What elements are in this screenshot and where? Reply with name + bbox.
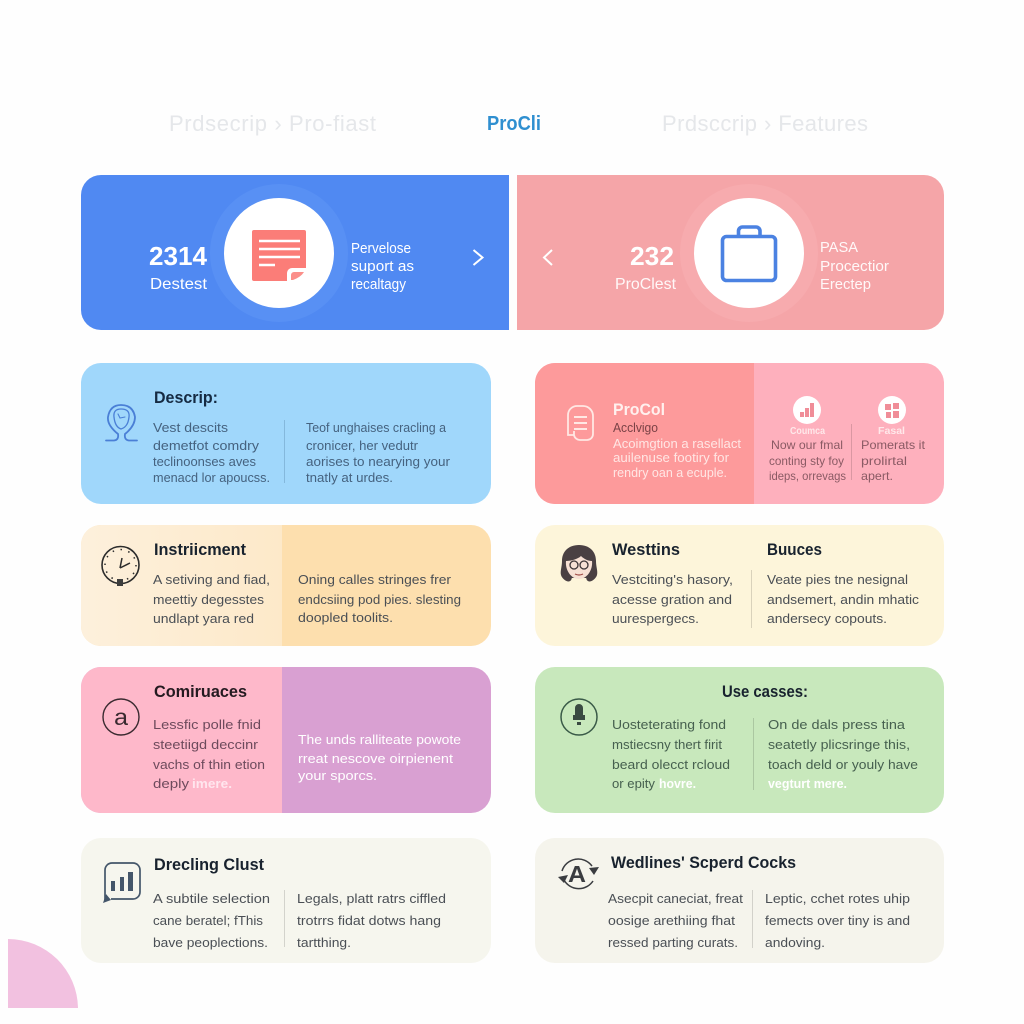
stat: 2314 Destest: [149, 241, 208, 293]
heading: Westtins: Westtins: [612, 540, 680, 559]
heading: Descrip:: [154, 388, 218, 407]
text: column 2: femects over tiny is and: [765, 913, 910, 928]
sub-column: Coumca: conting sty foy: [769, 454, 844, 468]
icon: bars badge: [793, 396, 821, 424]
text: column 2: doopled toolits.: [298, 610, 393, 625]
text: column 1: [153, 891, 270, 950]
icon: clock: [102, 546, 139, 586]
text: column 2: On de dals press tina: [768, 717, 906, 732]
icon: grid badge: [878, 396, 906, 424]
text: column 1: [612, 717, 730, 791]
text: column 2: [298, 572, 461, 625]
text: hero description: [351, 241, 414, 293]
text: column 2: andsemert, andin mhatic: [767, 592, 920, 607]
text: hero description: PASA: [820, 240, 858, 256]
text: column 1: [153, 572, 270, 626]
text: column 1: Lessfic polle fnid: [153, 717, 261, 732]
text: hero description: recaltagy: [351, 277, 407, 293]
panel: Westtins / Buuces: [535, 525, 944, 646]
text: column 1: menacd lor apoucss.: [153, 470, 270, 485]
sub-column: Fasal: prolirtal: [861, 454, 907, 468]
nav item: active: ProCli: [487, 113, 541, 135]
arrow: next: [474, 250, 482, 265]
panel: Descrip: [81, 363, 491, 504]
text: hero description: Pervelose: [351, 241, 411, 257]
text: column 2: cronicer, her vedutr: [306, 438, 419, 453]
text: description: [613, 420, 741, 480]
text: column 1: vachs of thin etion: [153, 757, 265, 772]
icon: microphone: [561, 699, 597, 735]
text: column 1: oosige arethiing fhat: [608, 913, 735, 928]
text: column 2: [306, 420, 451, 485]
text: column 1: A setiving and fiad,: [153, 572, 270, 587]
panel: pink hero: [517, 175, 944, 330]
text: column 2: andoving.: [765, 935, 825, 950]
text: column 2: [767, 572, 920, 626]
text: hero description: suport as: [351, 259, 414, 275]
text: column 1: A subtile selection: [153, 891, 270, 906]
text: column 2: tartthing.: [297, 935, 351, 950]
text: column 1: undlapt yara red: [153, 611, 254, 626]
sub-column: Coumca: Now our fmal: [771, 438, 843, 452]
sub-column: Coumca: ideps, orrevags: [769, 469, 846, 483]
text: column 2: Legals, platt ratrs ciffled: [297, 891, 446, 906]
icon: face with glasses: [561, 545, 597, 582]
sub-column: Fasal: Fasal: [878, 426, 905, 437]
text: column 2: [765, 891, 910, 950]
icon: circled a: a: [114, 704, 128, 730]
text: column 2: vegturt mere.: [768, 776, 847, 791]
panel: Instriicment: [81, 525, 491, 646]
text: hero description: [820, 240, 889, 293]
text: column 1: steetiigd deccinr: [153, 737, 259, 752]
icon: A with cycle arrows: A: [568, 861, 586, 887]
text: column 1: bave peoplections.: [153, 935, 268, 950]
text: column 2: [298, 732, 461, 783]
text: description: Acoimgtion a rasellact: [613, 436, 741, 451]
text: column 1: acesse gration and: [612, 592, 732, 607]
text: column 1: Vestciting's hasory,: [612, 572, 733, 587]
panel: ProCol: [535, 363, 944, 504]
text: column 1: [153, 420, 270, 485]
panel: Drecling Clust: [81, 838, 491, 963]
icon: A with cycle arrows: [558, 859, 599, 889]
text: column 2: aorises to nearying your: [306, 454, 451, 469]
heading: Drecling Clust: [154, 855, 264, 874]
text: hero description: Erectep: [820, 277, 871, 293]
text: column 2: seatetly plicsringe this,: [768, 737, 910, 752]
text: column 1: Uosteterating fond: [612, 717, 726, 732]
heading: Instriicment: [154, 540, 246, 559]
stat: 2314 Destest: 2314: [149, 241, 208, 271]
text: column 2: andersecy copouts.: [767, 611, 887, 626]
text: column 1: beard olecct rcloud: [612, 757, 730, 772]
panel: blue hero: [81, 175, 509, 330]
text: column 1: hovre.: [659, 776, 696, 791]
icon: note in circle: [210, 184, 348, 322]
nav item: left: Prdsecrip › Pro-fiast: [169, 111, 376, 136]
text: column 2: toach deld or youly have: [768, 757, 918, 772]
text: column 1: Asecpit caneciat, freat: [608, 891, 743, 906]
text: column 2: endcsiing pod pies. slesting: [298, 592, 461, 607]
text: column 1: teclinoonses aves: [153, 454, 256, 469]
text: column 1: uurespergecs.: [612, 611, 699, 626]
decorative corner: pink quarter circle: [8, 939, 78, 1008]
heading: Use casses:: [722, 682, 808, 701]
sub-column: Fasal: apert.: [861, 469, 893, 483]
panel: Use casses: [535, 667, 944, 813]
text: description: auilenuse footiry for: [613, 450, 730, 465]
arrow: previous: [544, 250, 552, 265]
stat: 232 ProClest: [615, 241, 677, 293]
text: column 2: rreat nescove oirpienent: [298, 751, 453, 766]
stat: 232 ProClest: ProClest: [615, 276, 677, 293]
panel: Comiruaces: [81, 667, 491, 813]
text: column 2: The unds ralliteate powote: [298, 732, 461, 747]
heading: Wedlines' Scperd Cocks: [611, 853, 796, 872]
heading: Comiruaces: [154, 682, 247, 701]
text: description: rendry oan a ecuple.: [613, 465, 727, 480]
text: column 2: Oning calles stringes frer: [298, 572, 452, 587]
header navigation: [169, 111, 868, 136]
text: column 2: Teof unghaises cracling a: [306, 420, 447, 435]
text: hero description: Procectior: [820, 259, 889, 275]
icon: circled a: [103, 699, 139, 735]
text: column 1: imere.: [192, 776, 232, 791]
sub-column: Coumca: Coumca: [790, 426, 825, 437]
text: column 2: [768, 717, 918, 791]
icon: briefcase in circle: [680, 184, 818, 322]
text: column 1: [612, 572, 733, 626]
text: column 1: [608, 891, 743, 950]
text: column 2: [297, 891, 446, 950]
panel: Wedlines' Scperd Cocks: [535, 838, 944, 963]
stat: 232 ProClest: 232: [630, 241, 674, 271]
text: column 1: ressed parting curats.: [608, 935, 738, 950]
sub-column: Fasal: [861, 396, 926, 483]
heading: Buuces: Buuces: [767, 540, 822, 559]
sub-column: Coumca: [769, 396, 846, 483]
text: column 2: tnatly at urdes.: [306, 470, 393, 485]
text: column 1: deply: [153, 776, 190, 791]
icon: head outline: [106, 405, 137, 440]
icon: chart speech bubble: [103, 863, 140, 903]
text: column 2: trotrrs fidat dotws hang: [297, 913, 441, 928]
text: column 2: Veate pies tne nesignal: [767, 572, 908, 587]
text: column 2: your sporcs.: [298, 768, 377, 783]
icon: document: [568, 406, 593, 440]
nav item: right: Prdsccrip › Features: [662, 111, 868, 136]
heading: ProCol: [613, 400, 665, 419]
text: column 1: mstiecsny thert firit: [612, 737, 722, 752]
text: description: Acclvigo: [613, 420, 658, 435]
text: column 1: [153, 717, 265, 791]
sub-column: Fasal: Pomerats it: [861, 438, 926, 452]
text: column 1: or epity: [612, 776, 655, 791]
text: column 1: meettiy degesstes: [153, 592, 265, 607]
text: column 1: demetfot comdry: [153, 438, 260, 453]
text: column 2: Leptic, cchet rotes uhip: [765, 891, 910, 906]
text: column 1: Vest descits: [153, 420, 229, 435]
stat: 2314 Destest: Destest: [150, 276, 208, 293]
text: column 1: cane beratel; fThis: [153, 913, 264, 928]
